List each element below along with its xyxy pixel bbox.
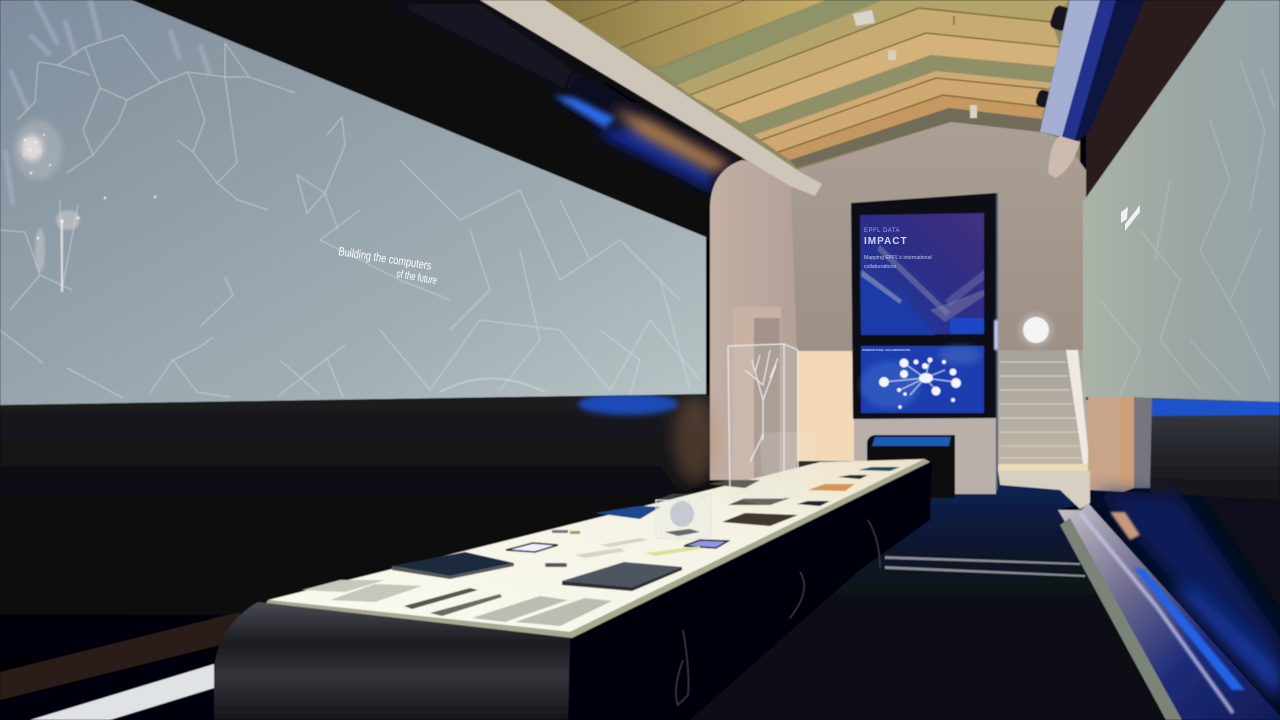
tall acrylic case with tree sculpture bbox=[728, 344, 814, 505]
floor trim bbox=[0, 612, 240, 700]
right lower wall bbox=[1088, 397, 1280, 720]
left screen caption bbox=[338, 244, 438, 287]
left screen caption: Building the computers bbox=[338, 244, 433, 273]
left black upper wall and duct bbox=[120, 0, 745, 250]
table legs bbox=[676, 520, 880, 705]
table side bbox=[545, 462, 932, 720]
left lower black wall bbox=[0, 395, 710, 672]
right screen caption bbox=[1121, 205, 1140, 231]
upper-left light streaks bbox=[5, 0, 210, 205]
wooden ceiling bbox=[540, 0, 1080, 175]
floor bbox=[690, 485, 1182, 720]
ceiling pipe bbox=[480, 0, 822, 196]
left screen caption: of the future bbox=[395, 268, 438, 287]
right projection wall backing bbox=[1086, 0, 1280, 405]
impact screen bbox=[860, 213, 984, 335]
left projection screen bbox=[0, 0, 706, 405]
glowing table top bbox=[268, 459, 925, 632]
smoke detector bbox=[853, 10, 875, 26]
totem screen title: collaborations bbox=[864, 264, 896, 270]
sparkle cluster bbox=[14, 120, 156, 292]
acrylic case with brain model bbox=[656, 493, 711, 539]
network lines bbox=[0, 35, 700, 398]
table front end bbox=[214, 602, 570, 720]
doorway in pillar bbox=[733, 307, 781, 480]
display table bbox=[214, 459, 932, 720]
display totem bbox=[851, 193, 998, 494]
light patch in front of stairs bbox=[998, 471, 1090, 509]
totem screen title bbox=[862, 228, 932, 352]
tablets on table bbox=[392, 467, 900, 591]
totem screen title: IMPACT bbox=[864, 236, 908, 247]
collaboration map screen bbox=[860, 345, 984, 413]
totem screen title: EPFL DATA bbox=[864, 228, 900, 234]
staircase and doorway bbox=[998, 350, 1090, 472]
right floor reflective curb bbox=[1058, 503, 1280, 720]
kiosk behind table bbox=[867, 435, 955, 498]
right projection screen bbox=[1083, 0, 1280, 402]
totem screen title: INTERNATIONAL COLLABORATIONS bbox=[862, 348, 910, 352]
round wall lamp bbox=[1019, 313, 1053, 347]
top right duct bbox=[1040, 0, 1145, 178]
totem screen title: Mapping EPFL's international bbox=[864, 255, 932, 261]
text blocks on table bbox=[302, 580, 612, 626]
warm corridor bbox=[797, 351, 854, 461]
ceiling spotlights bbox=[1049, 4, 1072, 32]
pillar beside screen bbox=[710, 160, 797, 480]
back wall bbox=[785, 122, 1086, 352]
